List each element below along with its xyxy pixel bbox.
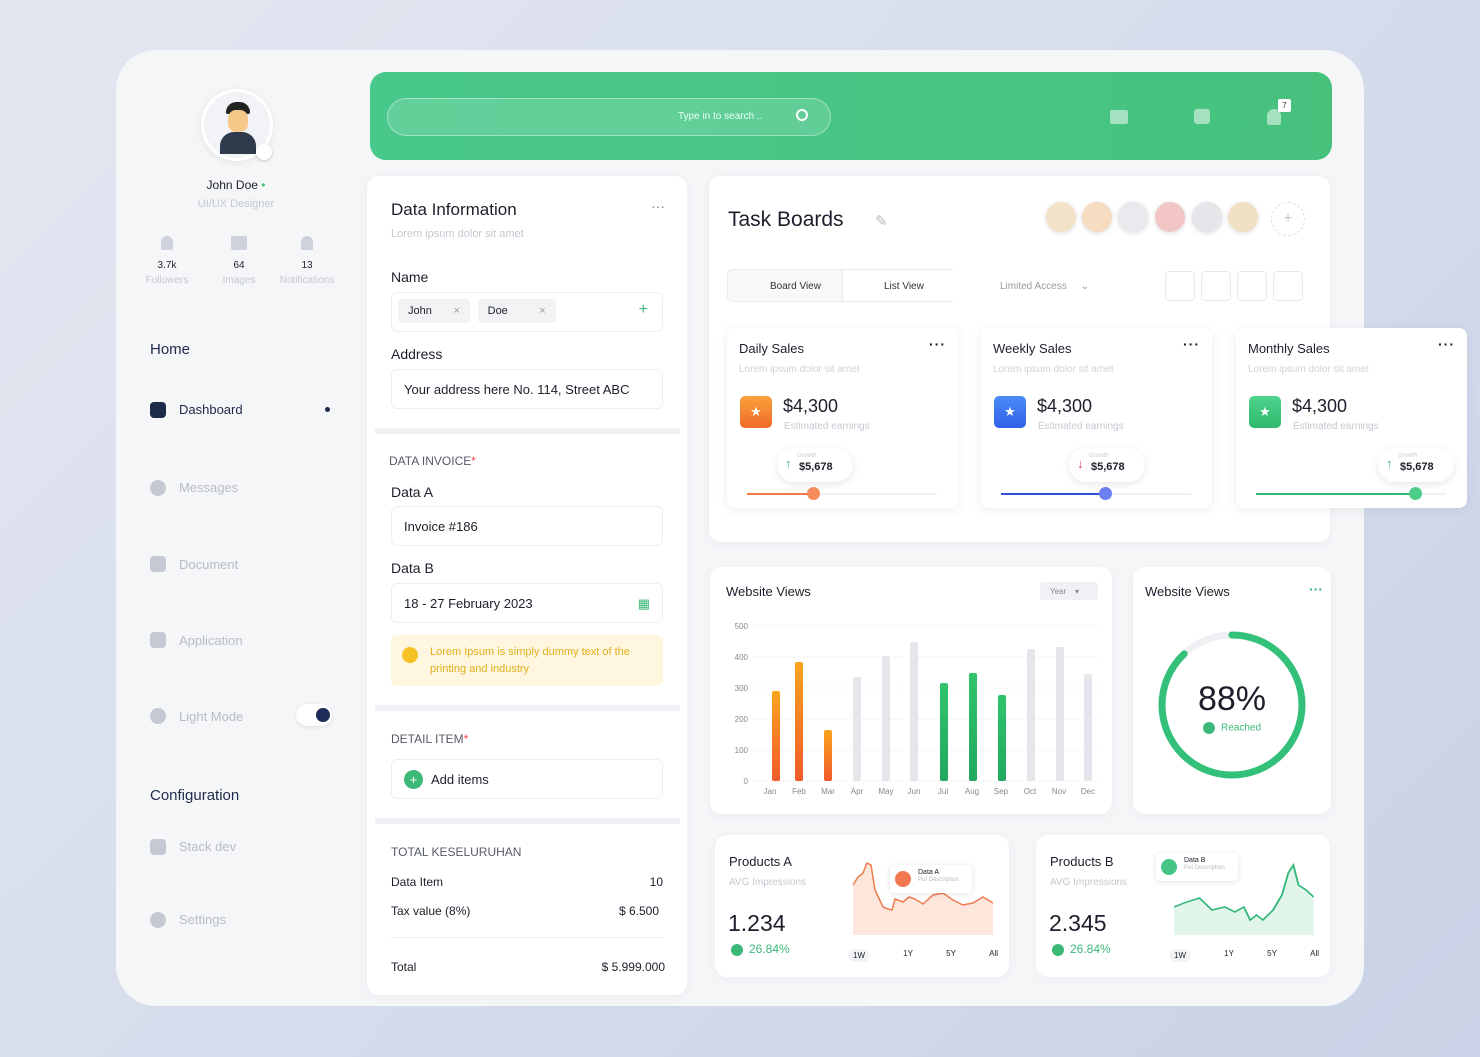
panel: task boards: Task Boards: [728, 208, 844, 231]
card: daily sales: $5,678: [799, 461, 833, 473]
card: monthly sales: ↑: [1386, 456, 1392, 471]
panel: data information: Lorem ipsum dolor sit amet: [391, 228, 524, 240]
panel: data information: Tax value (8%): [391, 904, 470, 918]
callout: [391, 635, 663, 686]
panel: products A: AVG Impressions: [729, 877, 806, 888]
panel: website views bar chart: Website Views: [726, 584, 811, 599]
sidebar: Settings: [179, 912, 226, 927]
card: weekly sales: [981, 328, 1212, 508]
panel: task boards: ✎: [875, 213, 888, 230]
stats: 3.7k: [158, 260, 176, 271]
header green: [370, 72, 1332, 160]
sidebar: Light Mode: [179, 709, 243, 724]
panel: data information: Address: [391, 346, 442, 362]
toggle: [296, 704, 332, 726]
card: monthly sales: [1236, 328, 1467, 508]
card: monthly sales: ★: [1259, 404, 1271, 419]
panel: products B: 5Y: [1267, 949, 1277, 958]
panel: products A: 1Y: [903, 949, 913, 958]
panel: task boards: +: [1283, 210, 1293, 227]
panel: website views bar chart: Dec: [1081, 787, 1095, 796]
callout: Lorem Ipsum is simply dummy text of the printing and industry: [430, 646, 630, 675]
panel: products A: [715, 835, 1009, 977]
card: daily sales: $4,300: [783, 396, 838, 416]
stats: 13: [301, 260, 313, 271]
card: monthly sales: Monthly Sales: [1248, 341, 1330, 356]
panel: products A: Data A: [918, 869, 939, 876]
panel: donut: Website Views: [1145, 584, 1230, 599]
panel: website views bar chart: 400: [735, 653, 749, 662]
panel: data information: $ 6.500: [619, 904, 659, 918]
panel: data information: Name: [391, 269, 428, 285]
panel: website views bar chart: 300: [735, 684, 749, 693]
panel: products A: Put Description: [918, 877, 959, 883]
panel: website views bar chart: Feb: [792, 787, 806, 796]
panel: website views bar chart: Mar: [821, 787, 835, 796]
panel: data information: DATA INVOICE*: [389, 454, 476, 468]
panel: task boards: [709, 176, 1330, 542]
panel: website views bar chart: Aug: [965, 787, 979, 796]
panel: website views bar chart: Apr: [851, 787, 864, 796]
card: daily sales: Growth: [797, 453, 816, 459]
card: daily sales: Lorem ipsum dolor sit amet: [739, 364, 860, 375]
panel: data information: 10: [650, 875, 663, 889]
card: monthly sales: $5,678: [1400, 461, 1434, 473]
panel: products A: 5Y: [946, 949, 956, 958]
panel: products B: 26.84%: [1070, 942, 1111, 956]
card: weekly sales: ···: [1183, 336, 1200, 352]
sidebar: Stack dev: [179, 839, 236, 854]
card: weekly sales: ↓: [1077, 456, 1084, 471]
view tabs: [727, 269, 957, 302]
panel: website views bar chart: 0: [744, 777, 749, 786]
panel: website views bar chart: Jul: [938, 787, 948, 796]
panel: donut: ···: [1309, 581, 1323, 597]
sidebar: UI/UX Designer: [198, 198, 274, 210]
panel: products B: 1W: [1174, 951, 1186, 960]
panel: data information: Data Item: [391, 875, 443, 889]
panel: donut: 88%: [1198, 680, 1266, 718]
panel: data information: TOTAL KESELURUHAN: [391, 845, 521, 859]
panel: data information: Data Information: [391, 200, 517, 219]
stats: Images: [223, 275, 255, 286]
panel: data information: ▦: [638, 596, 650, 611]
panel: products B: Products B: [1050, 854, 1114, 869]
name: John Doe •: [207, 178, 265, 192]
panel: products B: AVG Impressions: [1050, 877, 1127, 888]
stats: [146, 236, 334, 286]
card: monthly sales: ···: [1438, 336, 1455, 352]
card: daily sales: ···: [929, 336, 946, 352]
card: daily sales: Estimated earnings: [784, 421, 870, 432]
sidebar: Dashboard: [179, 402, 243, 417]
panel: products B: [1036, 835, 1330, 977]
panel: products A: 1W: [853, 951, 865, 960]
panel: website views bar chart: Jan: [764, 787, 776, 796]
sidebar: [146, 89, 334, 928]
panel: data information: ×: [539, 305, 546, 317]
panel: data information: Doe: [488, 305, 508, 317]
panel: website views bar chart: Oct: [1024, 787, 1037, 796]
panel: data information: Total: [391, 960, 416, 974]
header green: Type in to search ..: [678, 111, 762, 122]
main card: [116, 50, 1364, 1006]
panel: data information: Invoice #186: [404, 519, 478, 534]
card: monthly sales: Growth: [1398, 453, 1417, 459]
card: monthly sales: $4,300: [1292, 396, 1347, 416]
panel: products B: 2.345: [1049, 910, 1107, 936]
panel: website views bar chart: 200: [735, 715, 749, 724]
stats: Notifications: [280, 275, 334, 286]
panel: data information: John: [408, 305, 432, 317]
card: daily sales: Daily Sales: [739, 341, 804, 356]
panel: website views bar chart: [710, 567, 1112, 814]
panel: data information: Add items: [431, 772, 489, 787]
card: daily sales: ↑: [785, 456, 792, 471]
panel: products B: 1Y: [1224, 949, 1234, 958]
panel: website views bar chart: 100: [735, 746, 749, 755]
card: weekly sales: Estimated earnings: [1038, 421, 1124, 432]
stats: 64: [233, 260, 245, 271]
panel: website views bar chart: Sep: [994, 787, 1009, 796]
sidebar: Document: [179, 557, 238, 572]
panel: task boards: Limited Access ⌄: [1000, 281, 1089, 292]
panel: website views bar chart: Nov: [1052, 787, 1066, 796]
panel: data information: DETAIL ITEM*: [391, 732, 468, 746]
avatar: [201, 89, 273, 161]
card: daily sales: [727, 328, 958, 508]
panel: data information: +: [639, 301, 648, 318]
card: monthly sales: Lorem ipsum dolor sit amet: [1248, 364, 1369, 375]
panel: products A: 1.234: [728, 910, 786, 936]
panel: products B: Put Description: [1184, 865, 1225, 871]
card: weekly sales: $4,300: [1037, 396, 1092, 416]
panel: products A: All: [989, 949, 998, 958]
nav home: Home: [150, 341, 190, 358]
stats: Followers: [146, 275, 188, 286]
header green: 7: [1282, 101, 1287, 110]
card: weekly sales: Weekly Sales: [993, 341, 1072, 356]
panel: website views bar chart: May: [878, 787, 894, 796]
view tabs: List View: [884, 281, 924, 292]
panel: products A: 26.84%: [749, 942, 790, 956]
card: weekly sales: ★: [1004, 404, 1016, 419]
card: weekly sales: Lorem ipsum dolor sit amet: [993, 364, 1114, 375]
sidebar: Configuration: [150, 787, 239, 804]
panel: data information: ×: [454, 305, 460, 317]
panel: data information: ···: [651, 198, 665, 214]
panel: website views bar chart: Year ▾: [1050, 587, 1079, 596]
panel: website views bar chart: 500: [735, 622, 749, 631]
card: weekly sales: $5,678: [1091, 461, 1125, 473]
card: daily sales: ★: [750, 404, 762, 419]
panel: products B: Data B: [1184, 857, 1205, 864]
panel: donut: Reached: [1221, 723, 1261, 734]
card: weekly sales: Growth: [1089, 453, 1108, 459]
panel: products B: All: [1310, 949, 1319, 958]
panel: donut: [1133, 567, 1331, 814]
panel: data information: Your address here No. 114, Street ABC: [404, 382, 629, 397]
panel: data information: Data B: [391, 560, 434, 576]
panel: products A: Products A: [729, 854, 792, 869]
panel: data information: Data A: [391, 484, 433, 500]
panel: data information: 18 - 27 February 2023: [404, 596, 533, 611]
panel: website views bar chart: Jun: [908, 787, 920, 796]
sidebar: Application: [179, 633, 243, 648]
panel: data information: +: [410, 772, 417, 787]
view tabs: Board View: [770, 281, 821, 292]
card: monthly sales: Estimated earnings: [1293, 421, 1379, 432]
sidebar: Messages: [179, 480, 238, 495]
panel: data information: [367, 176, 687, 995]
panel: data information: $ 5.999.000: [602, 960, 665, 974]
